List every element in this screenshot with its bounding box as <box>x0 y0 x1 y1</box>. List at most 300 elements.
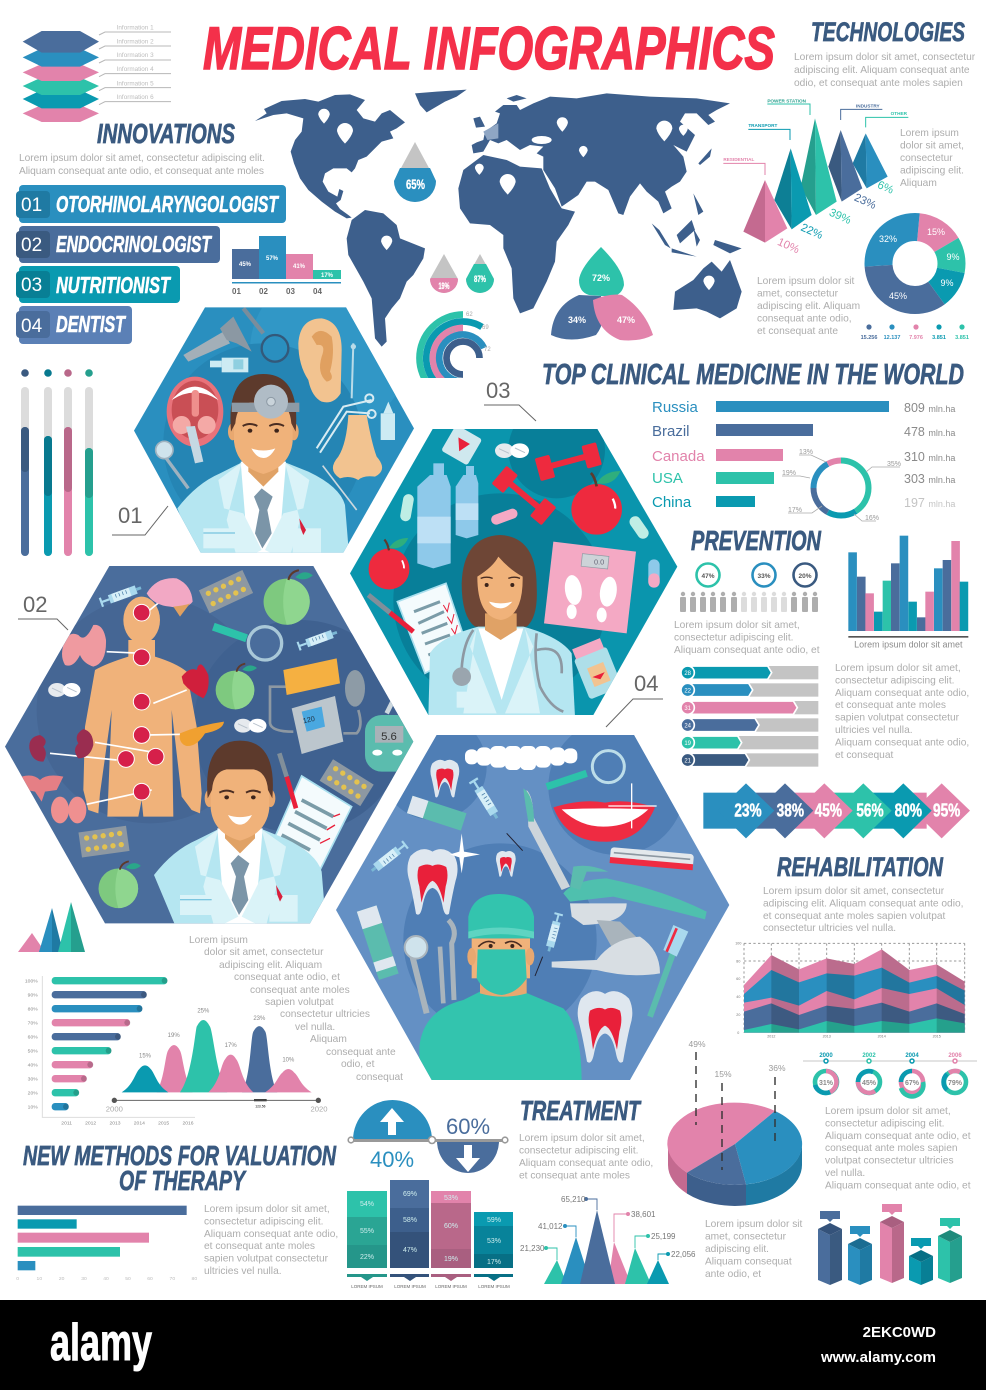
heading: prevention: PREVENTION <box>691 525 822 556</box>
concentric arc chart <box>416 311 490 378</box>
progress arrow bars: 19 <box>684 741 692 747</box>
small triangle chart <box>18 902 85 952</box>
mountain peak chart: 25,199 <box>651 1232 676 1241</box>
row of people icons <box>680 592 818 612</box>
list: four specialists <box>16 185 286 344</box>
text: map side note: et consequat ante <box>757 326 838 337</box>
rounded horizontal bar chart: 2015 <box>158 1120 169 1126</box>
icon: syringes <box>369 777 563 976</box>
stacked area chart: 2015 <box>933 1035 941 1039</box>
text: staircase paragraph: consectetur ultricies <box>280 1009 370 1020</box>
heading: treatment: TREATMENT <box>520 1095 642 1126</box>
text: staircase paragraph: consequat ante moles <box>250 985 350 996</box>
stacked column chart: LOREM IPSUM <box>435 1284 467 1289</box>
icon: dental mirror <box>156 441 188 488</box>
text: pie note: ante odio, et <box>705 1269 761 1280</box>
donut labels and legend: 45% <box>889 291 907 301</box>
stacked area chart: 100 <box>735 942 741 946</box>
heading: new methods: NEW METHODS FOR VALUATION <box>23 1140 337 1171</box>
text: rehabilitation details: consectetur adipiscing elit. <box>825 1118 944 1129</box>
icon: toothbrush <box>650 925 688 1017</box>
icon: forceps <box>317 394 376 453</box>
year timeline with donuts: 67% <box>905 1080 920 1087</box>
3d pie chart: 15% <box>714 1069 732 1079</box>
donut labels and legend: 9% <box>940 278 954 288</box>
drop 65% <box>394 142 436 202</box>
rounded horizontal bar chart: 40% <box>28 1063 38 1069</box>
text: technologies intro: Lorem ipsum dolor sit amet, consectetur <box>794 52 976 63</box>
text: technologies side note: dolor sit amet, <box>900 140 964 152</box>
icon: ear drops <box>210 358 248 372</box>
text: innovations intro: Lorem ipsum dolor sit amet, consectetur adipiscing elit. <box>19 153 265 164</box>
three progress rings: 20% <box>798 573 812 580</box>
country bar chart: Russia <box>652 399 699 416</box>
horizontal bar chart bottom left: 30 <box>81 1276 87 1282</box>
stacked column chart: LOREM IPSUM <box>351 1284 383 1289</box>
ring chart with percent callouts: 17% <box>788 507 802 514</box>
icon: dumbbell upper <box>535 442 602 481</box>
text: technologies side note: Lorem ipsum <box>900 128 959 139</box>
three petal chart: 34% <box>568 315 586 325</box>
text: prevention intro: Lorem ipsum dolor sit amet, <box>674 620 800 631</box>
text: rehabilitation intro: et consequat ante moles sapien volutpat <box>763 911 946 922</box>
layered hexagon stack with information labels: Information 2 <box>117 38 154 45</box>
drop 19%: 19% <box>438 281 450 291</box>
mountain peak chart <box>520 1195 696 1284</box>
ring chart with percent callouts: 13% <box>799 449 813 456</box>
rounded horizontal bar chart: 100% <box>25 979 38 985</box>
horizontal bar chart bottom left: 60 <box>147 1276 153 1282</box>
year timeline with donuts: 31% <box>819 1080 834 1087</box>
text: rehabilitation intro: adipiscing elit. Aliquam consequat ante odio, <box>763 898 964 909</box>
3d column chart <box>818 1204 962 1285</box>
text: map side note: adipiscing elit. Aliquam <box>757 301 860 312</box>
text: rehabilitation details: consequat ante moles sapien <box>825 1143 958 1154</box>
heading: innovations: INNOVATIONS <box>97 118 235 149</box>
3d pyramid chart <box>723 98 908 256</box>
text: map side note: consequat ante odio, <box>757 314 852 324</box>
rounded horizontal bar chart: 20% <box>28 1091 38 1097</box>
concentric arc chart: 62 <box>466 312 473 318</box>
icon: otoscope <box>183 317 252 362</box>
icon: dental tools <box>405 920 454 1013</box>
callout 03: 03 <box>486 378 510 403</box>
text: prevention details: Aliquam consequat ante odio, <box>835 688 969 699</box>
3d pyramid chart: RESIDENTIAL <box>723 157 755 162</box>
banner 03 nutritionist <box>16 266 180 303</box>
chevron percentage strip: 45% <box>815 800 842 821</box>
progress arrow bars: 22 <box>684 688 692 694</box>
vertical progress bars <box>21 369 93 556</box>
3d pie chart: 36% <box>768 1063 786 1073</box>
country bar chart: 310 mln.ha <box>904 450 955 464</box>
three petal chart: 72% <box>592 273 610 283</box>
mountain peak chart: 38,601 <box>631 1210 656 1219</box>
donut labels and legend: 15% <box>927 227 945 237</box>
text: pie note: amet, consectetur <box>705 1232 787 1242</box>
icon: clipboard and pen <box>368 583 468 673</box>
icon: smiling lips <box>553 783 657 842</box>
horizontal bar chart bottom left: 10 <box>37 1276 42 1282</box>
stacked column chart: 53% <box>444 1195 458 1202</box>
icon: red apple right <box>571 471 622 535</box>
icon: blood pressure monitor <box>270 658 365 754</box>
rounded horizontal bar chart: 60% <box>28 1035 38 1041</box>
horizontal bar chart bottom left: 0 <box>16 1276 19 1282</box>
icon: red apple left <box>369 538 409 589</box>
bell curve chart with timeline <box>106 1009 328 1114</box>
icon: reproductive organs <box>22 776 86 823</box>
text: staircase paragraph: consequat ante odio, et <box>234 972 340 983</box>
bell curve chart with timeline: 17% <box>225 1043 237 1049</box>
text: prevention details: et consequat ante moles <box>835 700 946 711</box>
rounded horizontal bar chart: 2011 <box>61 1120 72 1126</box>
banner 02 endocrinologist: ENDOCRINOLOGIST <box>56 231 212 257</box>
mountain peak chart: 21,230 <box>520 1244 545 1253</box>
icon: heart <box>182 664 209 698</box>
banner 03 nutritionist: 03 <box>21 275 42 296</box>
text: rehabilitation details: Aliquam consequat ante odio, et <box>825 1131 971 1142</box>
year timeline with donuts: 45% <box>862 1080 877 1087</box>
stacked column chart <box>347 1180 513 1289</box>
text: prevention details: et consequat <box>835 750 894 761</box>
chevron percentage strip: 80% <box>895 800 922 821</box>
icon: small water bottle <box>456 466 478 538</box>
chevron percentage strip: 38% <box>777 800 804 821</box>
site url: www.alamy.com <box>820 1349 936 1366</box>
icon: green apples <box>99 570 313 908</box>
stacked column chart: 59% <box>487 1217 501 1224</box>
layered hexagon stack with information labels: Information 6 <box>117 94 154 101</box>
icon: toothpaste tubes <box>357 796 466 980</box>
text: innovations intro line two: Aliquam consequat ante odio, et consequat ante moles <box>19 166 264 177</box>
icon: teeth with pulp <box>407 760 632 1063</box>
year timeline with donuts: 79% <box>948 1080 963 1087</box>
text: treatment intro: Aliquam consequat ante odio, <box>519 1158 653 1169</box>
drop 87% <box>466 254 494 293</box>
country bar chart: China <box>652 494 692 511</box>
callout 04: 04 <box>634 671 658 696</box>
donut labels and legend: 9% <box>946 252 960 262</box>
country bar chart: 809 mln.ha <box>904 401 955 415</box>
drop 65%: 65% <box>406 176 425 192</box>
text: rehabilitation intro: Lorem ipsum dolor sit amet, consectetur <box>763 886 945 897</box>
stacked column chart: 22% <box>360 1254 374 1261</box>
banner 04 dentist: 04 <box>21 316 43 337</box>
stacked area chart: 2013 <box>823 1035 831 1039</box>
text: staircase paragraph: adipiscing elit. Aliquam <box>219 960 322 971</box>
bell curve chart with timeline: 10% <box>282 1057 295 1063</box>
icon: glucose meter: 5.6 <box>381 731 397 743</box>
text: staircase paragraph: Aliquam <box>310 1034 347 1045</box>
concentric arc chart: 31 <box>449 328 456 334</box>
logo text alamy: alamy <box>50 1314 152 1372</box>
text: staircase paragraph: vel nulla. <box>295 1022 335 1033</box>
concentric arc chart: 69 <box>482 325 489 331</box>
text: prevention details: sapien volutpat consectetur <box>835 713 960 724</box>
rounded horizontal bar chart: 10% <box>28 1105 38 1111</box>
text: pie note: adipiscing elit. <box>705 1244 769 1255</box>
layered hexagon stack with information labels: Information 4 <box>117 66 154 73</box>
icon: braces <box>610 847 694 870</box>
year timeline with donuts: 2002 <box>862 1053 876 1059</box>
40% / 60% semicircle gauge <box>348 1100 508 1173</box>
title: MEDICAL INFOGRAPHICS <box>203 15 775 82</box>
icon: large water bottle <box>417 463 451 568</box>
three petal chart: 47% <box>617 315 635 325</box>
banner 02 endocrinologist <box>16 226 220 263</box>
stacked column chart: 69% <box>403 1191 417 1198</box>
text: pie note: Aliquam consequat <box>705 1256 792 1268</box>
text: treatment intro: et consequat ante moles <box>519 1170 630 1182</box>
mountain peak chart: 65,210 <box>561 1195 586 1204</box>
year timeline with donuts: 2004 <box>905 1053 919 1059</box>
country bar chart: Brazil <box>652 423 690 440</box>
progress arrow bars <box>681 666 818 767</box>
text: rehabilitation details: Lorem ipsum dolor sit amet, <box>825 1106 951 1117</box>
doctor <box>154 741 326 925</box>
40% / 60% semicircle gauge: 60% <box>446 1114 490 1139</box>
bell curve chart with timeline: 15% <box>139 1054 152 1060</box>
banner 01 otorhinolaryngologist: 01 <box>21 195 42 216</box>
country bar chart: 303 mln.ha <box>904 472 955 486</box>
callout 02 <box>18 592 68 630</box>
stacked area chart: 2012 <box>767 1035 775 1039</box>
small bar chart 01-04: 02 <box>259 287 268 296</box>
text: staircase paragraph: Lorem ipsum <box>189 935 248 946</box>
text: technologies intro: odio, et consequat ante moles sapien <box>794 78 963 89</box>
3d pyramid chart: 39% <box>827 207 853 227</box>
text: prevention details: Lorem ipsum dolor sit amet, <box>835 663 961 674</box>
progress arrow bars: 28 <box>684 671 692 677</box>
prevention column chart <box>848 536 968 650</box>
horizontal bar chart bottom left: 40 <box>103 1276 109 1282</box>
icon: bathroom scale: 0.0 <box>594 558 604 567</box>
rounded horizontal bar chart: 70% <box>28 1021 38 1027</box>
concentric arc chart: 72 <box>484 347 491 353</box>
ring chart with percent callouts: 19% <box>782 470 796 477</box>
stacked column chart: 47% <box>403 1247 417 1254</box>
ring chart with percent callouts: 16% <box>865 515 879 522</box>
ring chart with percent callouts <box>782 449 901 522</box>
ring chart with percent callouts: 35% <box>887 461 901 468</box>
icon: magnifier <box>547 751 624 787</box>
3d pyramid chart: 10% <box>775 236 801 256</box>
nutritionist woman <box>428 535 575 717</box>
3d pyramid chart: 6% <box>875 179 895 197</box>
callout 03 <box>484 378 536 421</box>
year timeline with donuts <box>803 1053 977 1096</box>
icon: supplement jar <box>442 429 482 464</box>
small bar chart 01-04: 01 <box>232 287 241 296</box>
stacked column chart: 60% <box>444 1223 458 1230</box>
icon: bathroom scale <box>544 542 636 633</box>
stacked area chart: 60 <box>736 977 740 981</box>
drop 19% <box>430 254 458 293</box>
chevron percentage strip <box>703 783 970 838</box>
horizontal bar chart bottom left: 50 <box>125 1276 131 1282</box>
icon: blood pressure monitor: 120 <box>302 714 316 725</box>
text: rehabilitation intro: consectetur ultricies vel nulla. <box>763 923 896 934</box>
stacked column chart: LOREM IPSUM <box>394 1284 426 1289</box>
icon: nose <box>333 415 382 480</box>
text: staircase paragraph: dolor sit amet, consectetur <box>204 947 324 958</box>
bell curve chart with timeline: 25% <box>197 1009 210 1015</box>
donut labels and legend <box>861 227 969 341</box>
heading: new methods <box>23 1140 337 1196</box>
3d pyramid chart: TRANSPORT <box>748 123 777 128</box>
progress arrow bars: 24 <box>684 723 692 729</box>
small bar chart 01-04: 17% <box>321 273 334 279</box>
text: new methods details: sapien volutpat consectetur <box>204 1254 329 1265</box>
small bar chart 01-04: 03 <box>286 287 295 296</box>
donut labels and legend: 3.851 <box>932 335 946 341</box>
text: new methods details: ultricies vel nulla. <box>204 1266 282 1277</box>
text: map side note: Lorem ipsum dolor sit <box>757 276 855 287</box>
donut labels and legend: 3.851 <box>955 335 969 341</box>
stacked column chart: LOREM IPSUM <box>478 1284 510 1289</box>
text: prevention details: consectetur adipiscing elit. <box>835 675 954 686</box>
icon: diet pill jar <box>572 638 617 699</box>
country bar chart: 478 mln.ha <box>904 425 955 439</box>
layered hexagon stack with information labels: Information 5 <box>117 80 154 87</box>
rounded horizontal bar chart <box>25 976 195 1126</box>
surgeon in cap and mask <box>419 894 582 1083</box>
country bar chart: USA <box>652 470 683 487</box>
bell curve chart with timeline: 2000 <box>106 1105 123 1114</box>
icon: capsules <box>399 493 660 588</box>
text: rehabilitation details: vel nulla. <box>825 1168 865 1179</box>
callout 04 <box>606 671 663 727</box>
bell curve chart with timeline: 19% <box>168 1033 180 1039</box>
three petal chart <box>551 247 653 340</box>
small bar chart 01-04: 41% <box>293 264 306 270</box>
icon: pill packs <box>78 570 374 858</box>
three progress rings: 47% <box>701 573 715 580</box>
icon: white tablets <box>48 683 266 733</box>
icon: row of teeth <box>465 746 577 770</box>
bell curve chart with timeline: 23% <box>253 1016 266 1022</box>
icon: brain <box>147 578 193 617</box>
text: technologies side note: Aliquam <box>900 178 937 189</box>
text: rehabilitation details: Aliquam consequat ante odio, et <box>825 1180 971 1191</box>
3d pie chart: 49% <box>688 1039 706 1049</box>
text: new methods details: Lorem ipsum dolor sit amet, <box>204 1204 330 1215</box>
icon: dumbbell lower <box>492 466 556 525</box>
three progress rings: 33% <box>757 573 771 580</box>
text: new methods details: Aliquam consequat ante odio, <box>204 1229 338 1240</box>
rounded horizontal bar chart: 2013 <box>109 1120 121 1126</box>
year timeline with donuts: 2006 <box>948 1053 962 1059</box>
icon: kidneys <box>29 729 93 762</box>
rounded horizontal bar chart: 2014 <box>134 1120 145 1126</box>
text: prevention intro: Aliquam consequat ante odio, et <box>674 645 820 656</box>
text: staircase paragraph: consequat <box>356 1072 403 1083</box>
3d pyramid chart: 23% <box>852 192 878 212</box>
three progress rings <box>696 564 816 586</box>
banner 01 otorhinolaryngologist <box>16 185 286 223</box>
stacked area chart: 80 <box>736 959 740 963</box>
donut labels and legend: 7.976 <box>909 335 923 341</box>
footer band with watermark logo <box>0 1300 986 1390</box>
text: staircase paragraph: sapien volutpat <box>265 997 334 1008</box>
text: pie note: Lorem ipsum dolor sit <box>705 1219 803 1230</box>
doctor with head mirror <box>177 374 349 558</box>
year timeline with donuts: 2000 <box>819 1053 833 1059</box>
text: staircase paragraph: odio, et <box>341 1059 375 1070</box>
text: prevention intro: consectetur adipiscing elit. <box>674 632 793 644</box>
rounded horizontal bar chart: 80% <box>28 1007 38 1013</box>
icon: probe <box>351 343 356 398</box>
text: technologies intro: adipiscing elit. Aliquam consequat ante <box>794 65 970 76</box>
hexagon 02 endocrinologist illustration <box>5 566 413 925</box>
country bar chart: Canada <box>652 448 705 465</box>
callout 02: 02 <box>23 592 47 617</box>
icon: thyroid <box>62 625 106 667</box>
chevron percentage strip: 23% <box>734 800 762 821</box>
banner 02 endocrinologist: 02 <box>21 235 42 256</box>
stacked area chart: 20 <box>736 1013 740 1017</box>
rounded horizontal bar chart: 50% <box>28 1049 38 1055</box>
icon: sparkle <box>450 833 480 873</box>
stacked column chart: 19% <box>444 1256 458 1263</box>
bell curve chart with timeline: 123.56 <box>255 1105 266 1109</box>
body silhouette with markers <box>50 597 202 817</box>
icon: glucose meter <box>365 700 413 772</box>
heading: new methods: OF THERAPY <box>119 1165 247 1196</box>
stacked area chart: 2014 <box>878 1035 886 1039</box>
hexagon 04 dentist illustration <box>336 713 729 1083</box>
small bar chart 01-04 <box>232 236 341 296</box>
layered hexagon stack with information labels: Information 1 <box>117 24 154 31</box>
banner 03 nutritionist: NUTRITIONIST <box>56 272 171 298</box>
bell curve chart with timeline: 2020 <box>310 1105 328 1114</box>
small bar chart 01-04: 57% <box>266 256 279 262</box>
layered hexagon stack with information labels <box>23 24 171 122</box>
icon: magnifier green <box>213 627 282 660</box>
rounded horizontal bar chart: 2012 <box>85 1120 96 1126</box>
3d pie chart <box>667 1039 802 1206</box>
text: rehabilitation details: volutpat consectetur ultricies <box>825 1156 954 1167</box>
3d pyramid chart: 22% <box>799 222 824 242</box>
drop 87%: 87% <box>474 274 486 284</box>
text: treatment intro: consectetur adipiscing elit. <box>519 1146 638 1156</box>
donut labels and legend: 32% <box>879 234 897 244</box>
icon: syringes <box>99 583 338 651</box>
text: technologies side note: adipiscing elit. <box>900 166 964 176</box>
40% / 60% semicircle gauge: 40% <box>370 1147 414 1172</box>
world map with location pins <box>255 90 742 347</box>
icon: tablets <box>495 443 529 458</box>
horizontal bar chart bottom left <box>16 1206 197 1282</box>
3d pyramid chart: INDUSTRY <box>856 103 881 108</box>
donut labels and legend: 12.137 <box>884 335 900 341</box>
country bar chart: 197 mln.ha <box>904 496 955 510</box>
small bar chart 01-04: 45% <box>239 262 252 268</box>
mountain peak chart: 22,056 <box>671 1250 696 1259</box>
chevron percentage strip: 56% <box>856 800 884 821</box>
stacked area chart <box>735 942 965 1039</box>
stacked column chart: 58% <box>403 1217 417 1224</box>
icon: ear instrument <box>323 466 357 510</box>
progress arrow bars: 31 <box>684 706 692 712</box>
text: prevention details: Aliquam consequat ante odio, <box>835 737 969 748</box>
text: staircase paragraph: consequat ante <box>326 1047 396 1058</box>
mountain peak chart: 41,012 <box>538 1222 563 1231</box>
horizontal bar chart bottom left: 80 <box>192 1276 197 1282</box>
icon: clipboard and pen <box>275 753 352 870</box>
text: new methods details: consectetur adipiscing elit. <box>204 1216 323 1227</box>
